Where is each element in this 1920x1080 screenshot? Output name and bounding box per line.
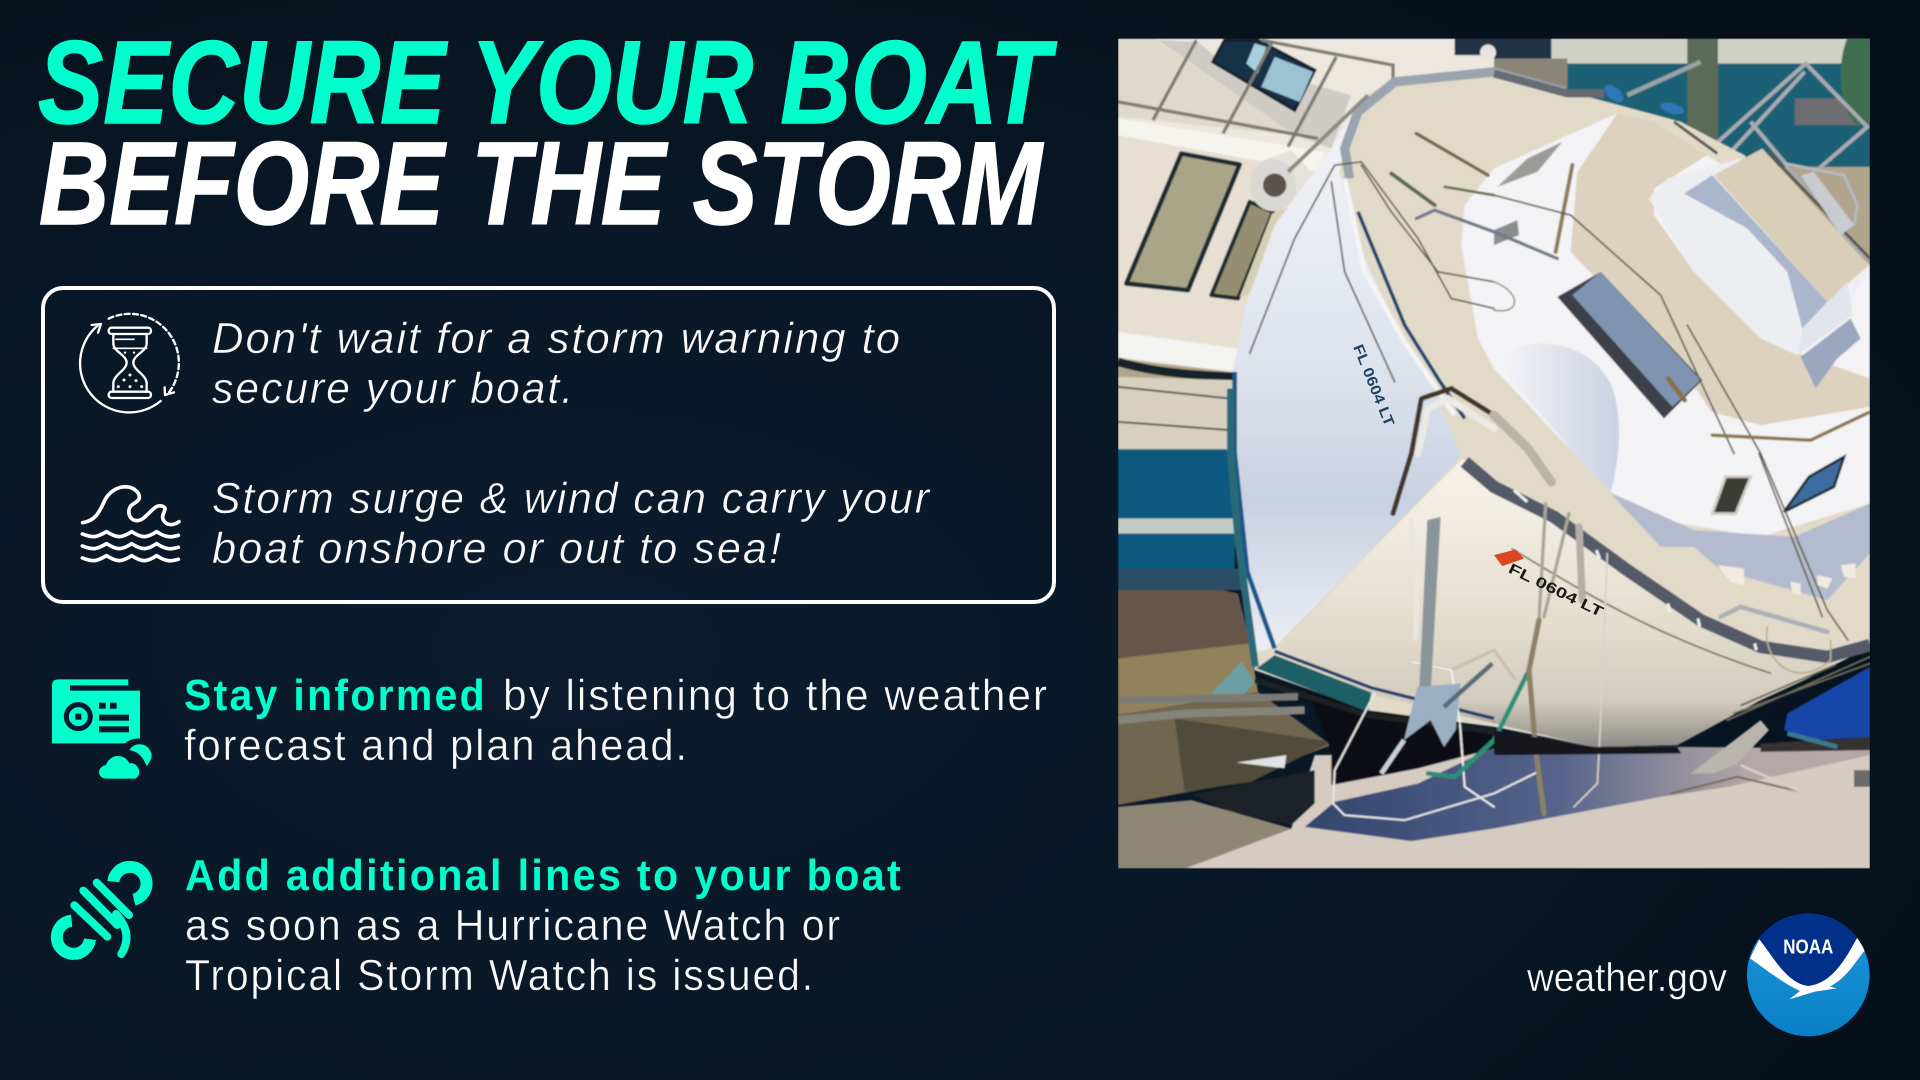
railing hardware right xyxy=(1674,122,1870,258)
ground: mud, grass and puddle xyxy=(1118,589,1250,660)
text: additional lines: as soon as a Hurricane Watch or xyxy=(185,901,842,950)
cabin trunk xyxy=(1461,113,1870,537)
left boat xyxy=(1118,38,1495,162)
panel: warnings box xyxy=(43,288,1054,602)
text: additional lines: Add additional lines to your boat xyxy=(185,851,903,900)
orange registration sticker xyxy=(1494,549,1524,566)
text: stay informed: by listening to the weather xyxy=(503,671,1049,720)
round bump xyxy=(1528,344,1620,492)
toe rail xyxy=(1465,462,1870,657)
dodger hump xyxy=(1648,158,1798,356)
text: storm warning: secure your boat. xyxy=(212,364,575,413)
background buildings xyxy=(1118,165,1870,380)
icon: NOAA logo: NOAA xyxy=(1783,935,1833,958)
loose lines and rigging xyxy=(1250,133,1870,820)
text: additional lines xyxy=(185,851,903,1000)
text: weather.gov: weather.gov xyxy=(1526,956,1727,1000)
forward hatch xyxy=(1557,272,1702,418)
blue tarp xyxy=(1784,667,1870,740)
text: additional lines: Tropical Storm Watch is issued. xyxy=(185,951,815,1000)
anchor chain xyxy=(1393,388,1494,513)
bow rail right xyxy=(1712,63,1867,258)
hull port side xyxy=(1230,98,1461,653)
small hatches and ports xyxy=(1497,142,1562,187)
icon: NOAA logo xyxy=(1747,914,1870,1036)
icon: waves xyxy=(82,487,179,561)
text: stay informed: Stay informed xyxy=(184,671,487,720)
photo: damaged sailboat beached on shore xyxy=(1118,25,1882,868)
title: BEFORE THE STORM xyxy=(39,118,1044,250)
text: stay informed: forecast and plan ahead. xyxy=(184,721,689,770)
shadow on foredeck xyxy=(1611,493,1870,600)
cabin top deck xyxy=(1571,113,1870,425)
hull lettering: FL 0604 LT xyxy=(1349,342,1397,429)
icon: hourglass with circular arrows xyxy=(80,314,179,412)
silver bow rail xyxy=(1345,72,1565,178)
photo: damaged sailboat beached on shore: FL 0604 LT xyxy=(1506,561,1606,621)
main boat base: foredeck xyxy=(1230,70,1870,747)
icon: coiled rope xyxy=(57,867,147,954)
debris xyxy=(1691,720,1769,773)
sand and shadow xyxy=(1185,748,1870,868)
blue bollards and fittings xyxy=(1627,62,1701,95)
round fender xyxy=(1262,150,1310,190)
text: storm surge xyxy=(212,474,931,573)
dark gap under hull xyxy=(1494,730,1681,755)
hull lower side xyxy=(1318,458,1820,748)
pipes xyxy=(1118,697,1298,700)
dock lines xyxy=(1418,398,1494,453)
text: storm surge: Storm surge & wind can carry your xyxy=(212,474,931,523)
title: SECURE YOUR BOAT xyxy=(38,17,1057,149)
text: storm warning: Don't wait for a storm warning to xyxy=(212,314,902,363)
text: storm surge: boat onshore or out to sea! xyxy=(212,524,783,573)
text: storm warning xyxy=(212,314,902,413)
icon: radio with cloud xyxy=(52,679,152,779)
title xyxy=(38,17,1057,250)
anchor xyxy=(1419,517,1441,693)
text: stay informed xyxy=(184,671,1049,770)
